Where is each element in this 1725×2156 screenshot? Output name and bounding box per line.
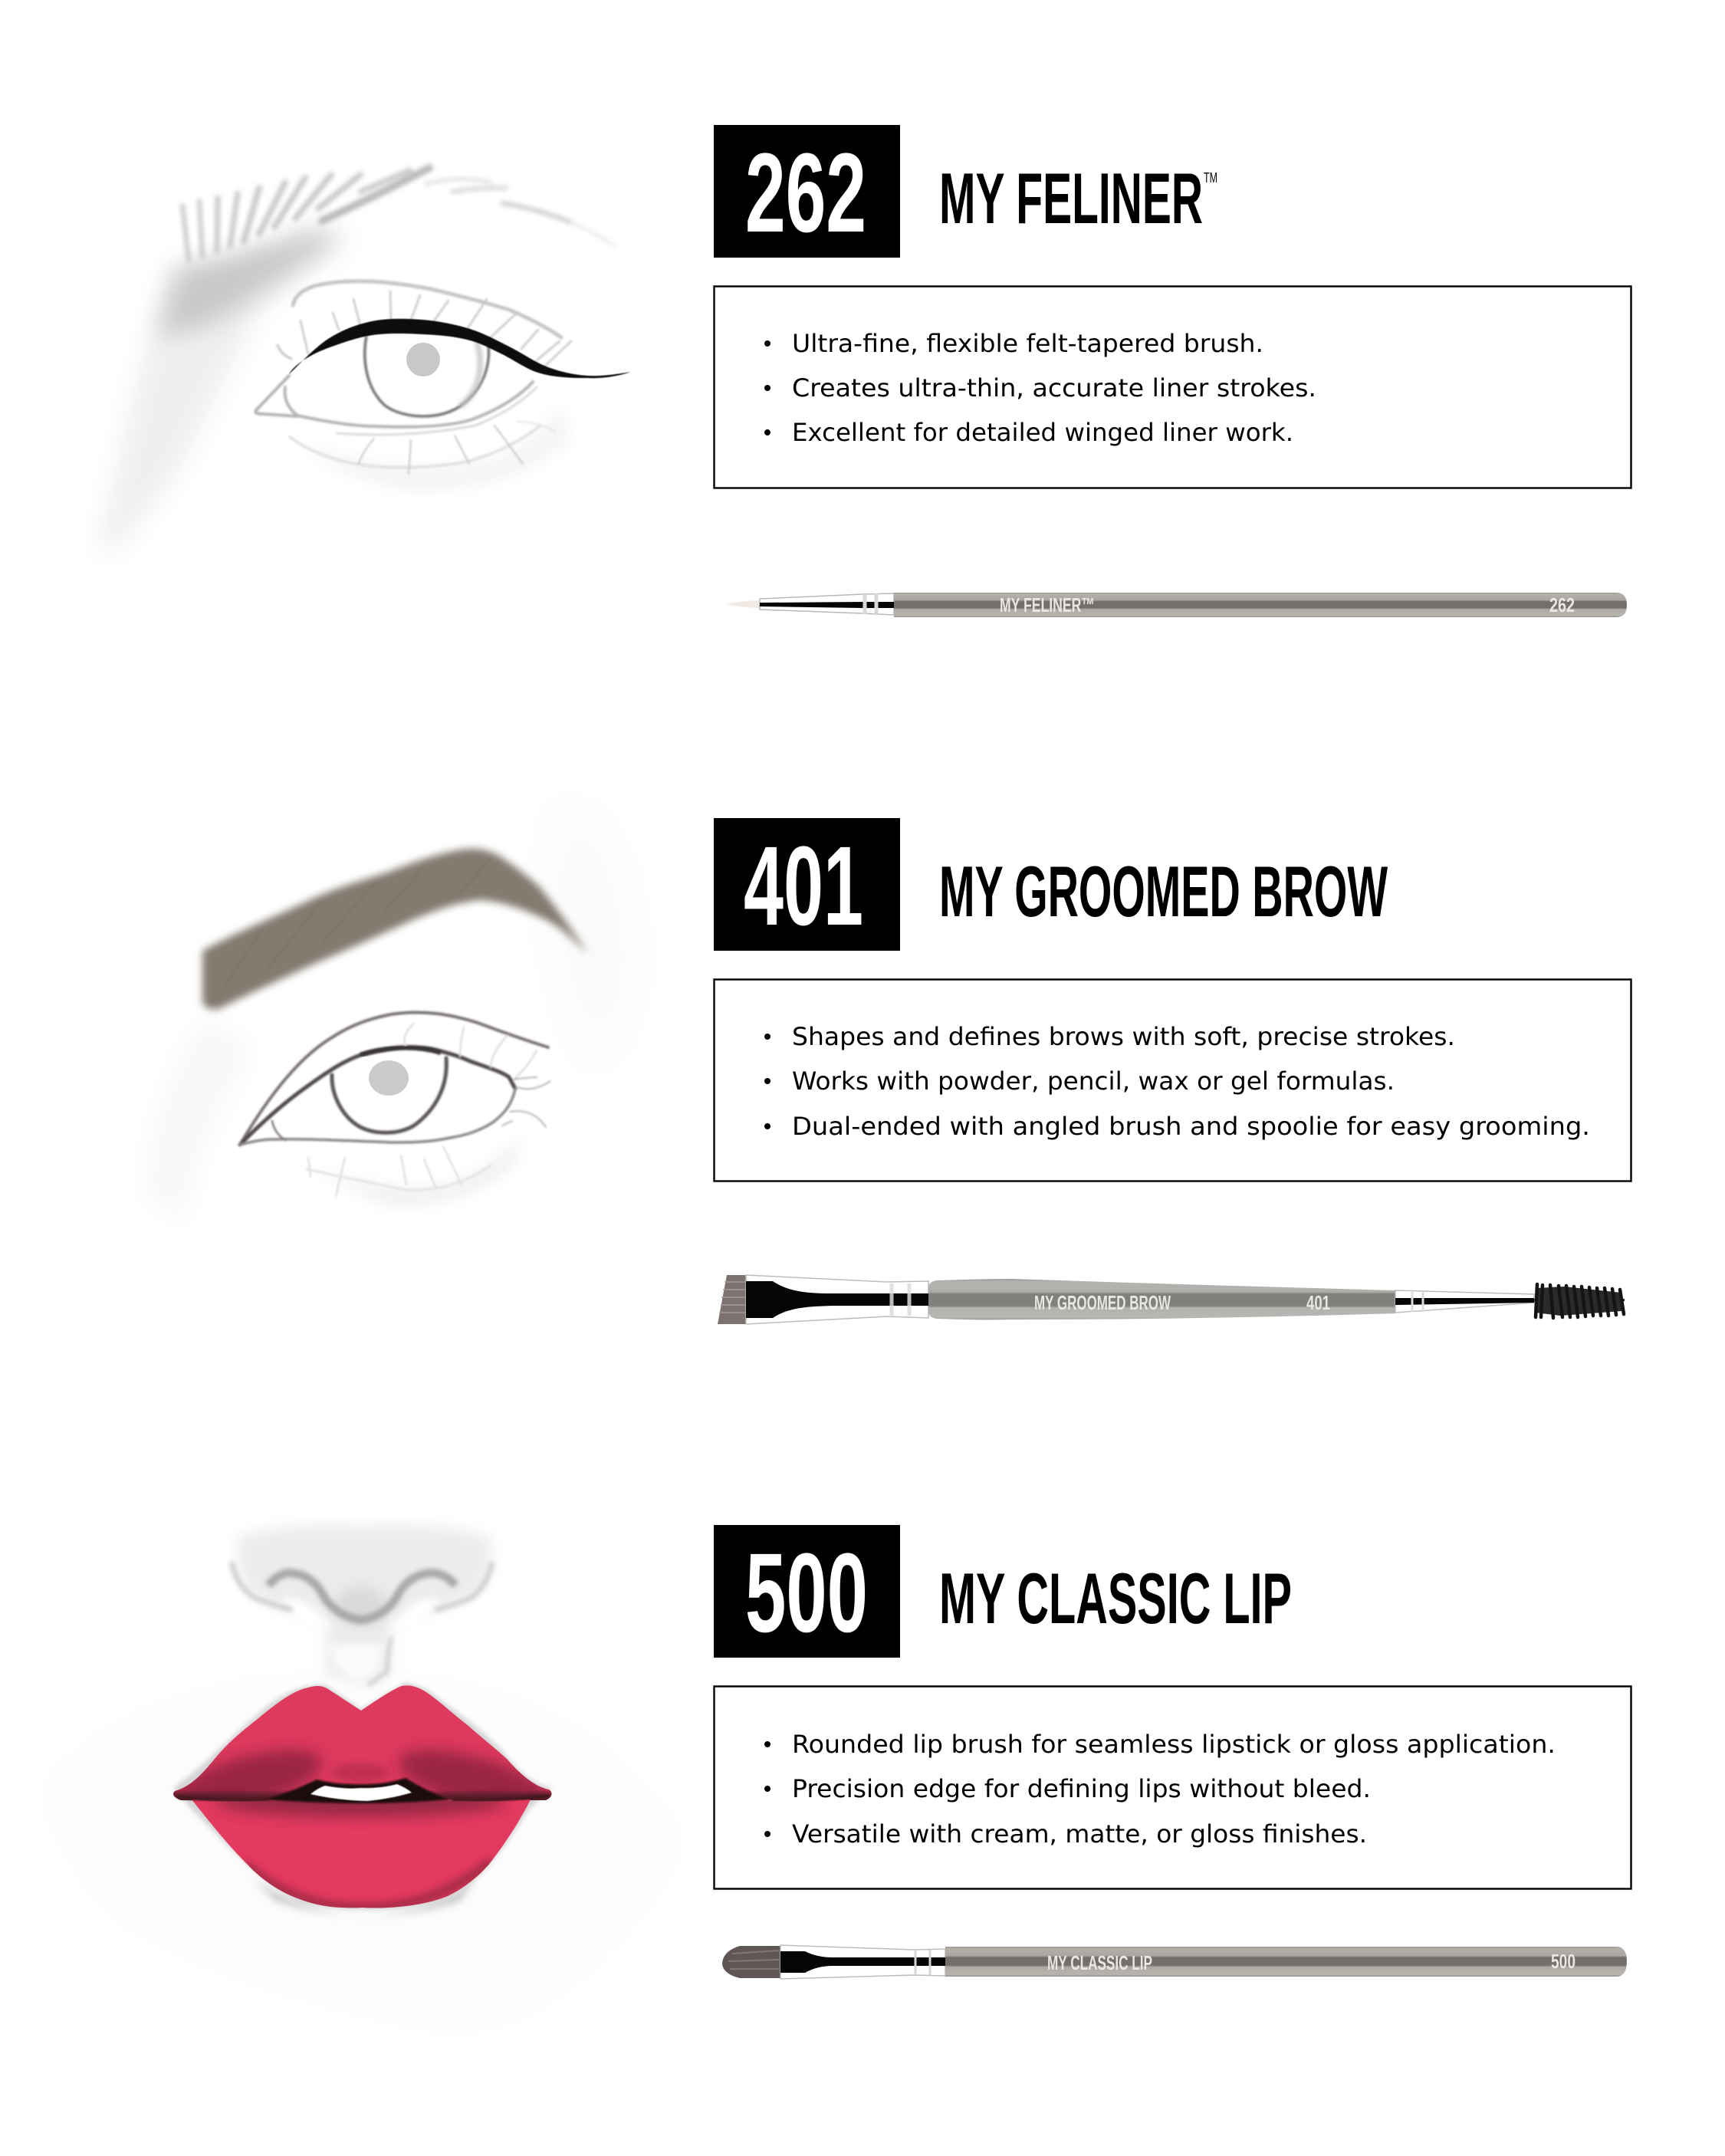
brush: 262: 262: [1549, 593, 1575, 616]
description box: lip features: Versatile with cream, matte, or gloss finishes.: [792, 1819, 1367, 1849]
brush: 401 dual-ended: MY GROOMED BROW: [1034, 1291, 1171, 1314]
description box: lip features: Precision edge for defining lips without bleed.: [792, 1774, 1371, 1803]
brush: 500: MY CLASSIC LIP: [1047, 1951, 1152, 1974]
upper lip: [173, 1685, 552, 1800]
heading: My Groomed Brow: MY GROOMED BROW: [939, 851, 1388, 932]
description box: brow features: Shapes and defines brows with soft, precise strokes.: [792, 1022, 1455, 1051]
brush: 401 dual-ended: [718, 1275, 1625, 1324]
description box: feliner features: Creates ultra-thin, accurate liner strokes.: [792, 373, 1316, 403]
description box: feliner features: Ultra-fine, flexible felt-tapered brush.: [792, 329, 1263, 358]
brush: 262: [725, 593, 1627, 617]
description box: lip features: [715, 1687, 1631, 1889]
description box: lip features: Rounded lip brush for seamless lipstick or gloss application.: [792, 1730, 1556, 1759]
badge: 500: 500: [745, 1530, 868, 1656]
heading: My Feliner: [939, 158, 1217, 238]
description box: brow features: Dual-ended with angled brush and spoolie for easy grooming.: [792, 1112, 1590, 1141]
lower lip: [192, 1799, 531, 1908]
description box: brow features: [715, 980, 1631, 1181]
section: 401 My Groomed Brow: [146, 797, 1631, 1324]
brush: 500: [722, 1945, 1627, 1979]
heading: My Classic Lip: MY CLASSIC LIP: [939, 1558, 1292, 1638]
badge: 262: 262: [745, 130, 866, 256]
description box: feliner features: Excellent for detailed winged liner work.: [792, 418, 1293, 447]
illustration: eye with groomed brow: [146, 797, 636, 1219]
nose: [232, 1525, 492, 1685]
badge: 401: 401: [744, 823, 863, 949]
icon: pupil highlight: [406, 343, 440, 376]
brush: 401 dual-ended: 401: [1306, 1291, 1330, 1314]
badge: 500: [714, 1525, 900, 1658]
brush: 500: 500: [1551, 1950, 1576, 1973]
section: 500 My Classic Lip: [172, 1524, 1632, 1980]
lip shadow: [253, 1878, 475, 1917]
eyebrow: [202, 849, 588, 1009]
badge: 262: [714, 125, 900, 258]
illustration: eye with winged liner: [98, 168, 631, 552]
heading: My Feliner: TM: [1204, 170, 1217, 186]
illustration: nose and red lips: [46, 1525, 675, 2024]
description box: brow features: Works with powder, pencil, wax or gel formulas.: [792, 1066, 1395, 1096]
section: 262 My Feliner: [98, 125, 1631, 617]
winged eyeliner stroke: [289, 319, 631, 378]
icon: pupil highlight: [369, 1060, 409, 1096]
badge: 401: [714, 818, 900, 951]
brush: 262: MY FELINER™: [1000, 593, 1095, 616]
mouth opening: [266, 1778, 448, 1803]
heading: My Feliner: MY FELINER: [939, 158, 1203, 238]
description box: feliner features: [715, 287, 1631, 488]
